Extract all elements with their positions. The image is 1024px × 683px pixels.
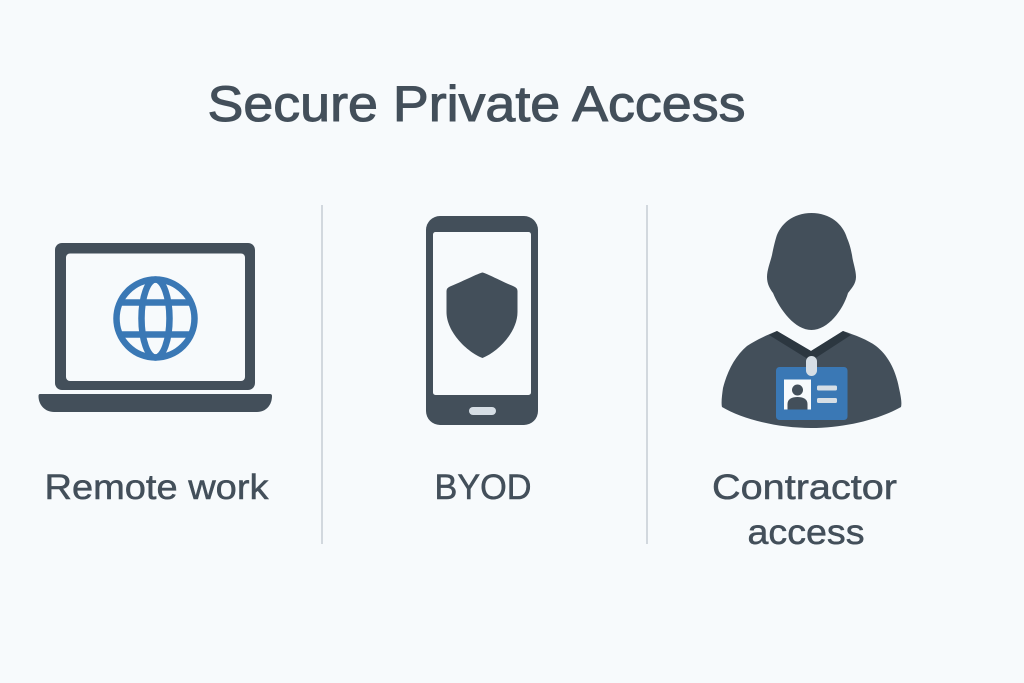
icon: globe <box>116 280 194 358</box>
ID badge <box>776 356 848 420</box>
label: contractor access <box>712 467 897 552</box>
icon: shield <box>446 272 518 358</box>
panel: remote work <box>38 243 272 507</box>
label: remote work: Remote work <box>44 467 269 507</box>
title: Secure Private Access <box>208 76 746 132</box>
label: BYOD: BYOD <box>434 467 532 507</box>
icon: phone with shield <box>426 216 538 425</box>
head <box>767 213 856 330</box>
icon: contractor with badge <box>722 213 901 428</box>
torso <box>722 331 901 428</box>
icon: laptop with globe <box>38 243 272 412</box>
panel: BYOD <box>426 216 538 507</box>
lanyard <box>769 331 851 361</box>
label: contractor access: Contractor <box>712 467 897 507</box>
panel: contractor access <box>712 213 901 552</box>
label: contractor access: access <box>748 512 864 552</box>
